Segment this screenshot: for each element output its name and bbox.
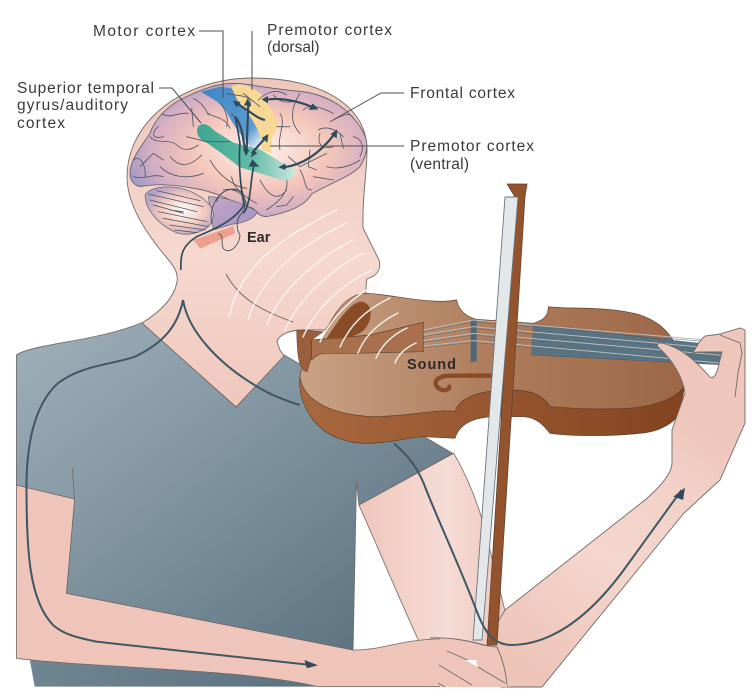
cerebellum xyxy=(145,187,213,234)
figure: brain xyxy=(130,83,367,270)
figure: bow xyxy=(473,184,527,645)
bow stick xyxy=(487,184,527,645)
figure: violin xyxy=(297,293,745,443)
lower shirt below arm xyxy=(30,660,318,687)
bow hair xyxy=(473,197,518,640)
label: sound: Sound xyxy=(407,357,456,373)
label: superior temporal gyrus: cortex xyxy=(17,115,65,132)
label: frontal cortex: Frontal cortex xyxy=(410,85,515,102)
label: ear: Ear xyxy=(247,230,271,246)
premotor cortex dorsal region xyxy=(232,84,278,153)
violin top xyxy=(300,293,685,417)
nerve pathway: motor output xyxy=(26,300,685,668)
fingerboard xyxy=(532,325,745,366)
shirt xyxy=(16,323,453,650)
sound waves xyxy=(229,210,416,363)
cerebellum folia xyxy=(148,191,208,233)
nerve pathways from the ear xyxy=(181,117,244,270)
label: premotor cortex dorsal: (dorsal) xyxy=(267,39,320,56)
label: superior temporal gyrus: Superior temporal xyxy=(17,80,154,97)
chin rest cup xyxy=(327,302,371,339)
label: premotor cortex dorsal: Premotor cortex xyxy=(267,22,392,39)
far forearm and hand on the neck xyxy=(487,328,745,687)
sulci xyxy=(133,91,362,210)
arrowhead xyxy=(304,660,318,668)
far arm: upper arm xyxy=(359,453,505,647)
bow hand outline and fingers xyxy=(430,638,507,687)
violin side xyxy=(300,377,685,443)
figure: head xyxy=(127,78,380,407)
nerve pathway: feedback to brain xyxy=(183,300,682,645)
brainstem xyxy=(208,197,257,230)
label: premotor cortex ventral: Premotor cortex xyxy=(410,138,534,155)
f-hole xyxy=(436,376,503,390)
arrowhead xyxy=(673,488,685,500)
gap between fingers xyxy=(465,660,478,667)
label: premotor cortex ventral: (ventral) xyxy=(410,156,469,173)
finger creases xyxy=(720,335,742,397)
near arm xyxy=(16,485,507,687)
figure: body, shirt and arms xyxy=(16,323,507,687)
chin rest xyxy=(297,330,323,372)
ear xyxy=(211,189,245,251)
motor cortex region xyxy=(201,87,261,149)
strings xyxy=(423,320,745,363)
leader lines xyxy=(159,31,404,146)
auditory and ventral premotor region xyxy=(197,124,297,180)
jaw line xyxy=(226,274,293,322)
spinal cord strip xyxy=(193,226,235,249)
near hand covering the bow end xyxy=(440,638,507,687)
tailpiece xyxy=(312,322,423,360)
brain hemisphere xyxy=(130,83,367,217)
cortical arrows xyxy=(233,96,337,170)
bridge xyxy=(471,319,477,362)
label: motor cortex: Motor cortex xyxy=(93,23,195,40)
label: superior temporal gyrus: gyrus/auditory xyxy=(17,97,128,114)
